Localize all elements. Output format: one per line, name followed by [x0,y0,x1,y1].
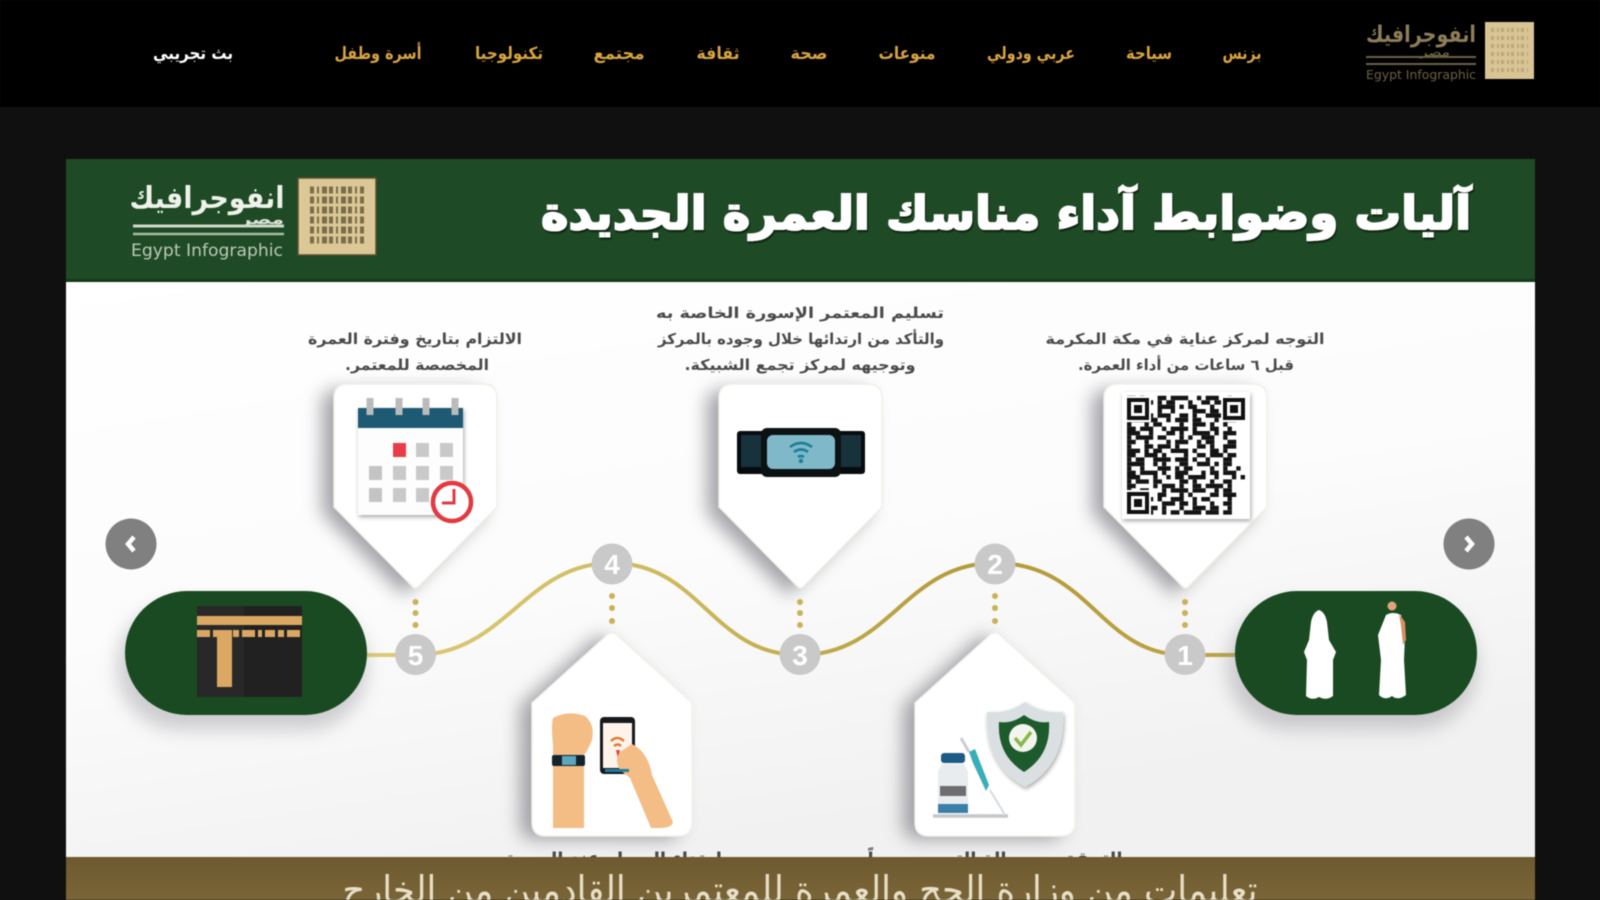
dotted connector: step 3 [797,599,803,628]
step 2 text clipped by band: التحقق من حالة التحصين معاً [867,847,1122,867]
dotted connector: step 4 [609,593,615,624]
dotted connector: step 1 [1182,599,1188,628]
step node 5 [395,634,436,675]
step 1 text: التوجه لمركز عناية في مكة المكرمة [1046,330,1324,348]
icon: woman pilgrim [1304,610,1336,699]
step node 4 [592,544,632,584]
icon: smart wristband [737,428,865,477]
step 1 text [1046,330,1324,374]
dotted connector: step 5 [412,599,418,628]
nav: business: بزنس [1222,44,1262,64]
nav: society: مجتمع [594,44,644,64]
panel: green title banner [66,159,1535,282]
step 5 text: الالتزام بتاريخ وفترة العمرة [308,330,522,348]
nav: tourism: سياحة [1126,44,1172,64]
step 5 text: المخصصة للمعتمر. [345,356,489,374]
nav: health: صحة [790,44,828,64]
dotted connector: step 2 [992,593,998,624]
panel: white infographic body [66,282,1535,860]
nav: arab and international: عربي ودولي [987,44,1075,64]
step node 5: 5 [408,640,423,671]
nav: test broadcast: بث تجريبي [153,44,233,64]
arrow: carousel previous [106,518,156,570]
step node 2 [974,544,1016,584]
card: step 2 vaccination [903,633,1075,839]
banner logo [130,178,376,261]
icon: clock [433,483,471,521]
step node 1: 1 [1177,640,1193,671]
banner logo: انفوجرافيك [130,181,284,216]
card: step 5 calendar [322,384,497,594]
banner logo: مصر [239,212,284,228]
icon: QR code [1122,392,1250,519]
step node 2: 2 [987,549,1003,580]
step node 3: 3 [792,640,808,671]
icon: Kaaba [197,606,302,697]
icon: hand scanning wristband with phone [552,713,673,828]
icon: shield and vaccine [933,702,1063,816]
top navigation bar [0,0,1600,107]
arrow: carousel next [1444,518,1494,570]
step 1 text: قبل ٦ ساعات من أداء العمرة. [1078,355,1294,374]
step 3 text: تسليم المعتمر الإسورة الخاصة به [656,304,944,322]
icon: calendar [358,398,471,521]
icon: man pilgrim [1378,602,1406,698]
nav: miscellaneous: منوعات [878,44,936,64]
title: آليات وضوابط آداء مناسك العمرة الجديدة [541,185,1472,240]
step 4 text clipped by band: ارتداء السوار عند العمرة [506,849,722,867]
site logo [1366,22,1534,82]
step 5 text [308,330,522,374]
step 3 text: والتأكد من ارتدائها خلال وجوده بالمركز [657,329,944,348]
nav: culture: ثقافة [696,44,740,64]
card: step 3 wristband [707,384,882,594]
card: step 4 phone and wristband [520,633,692,839]
nav: family and child: أسرة وطفل [334,42,422,64]
wavy gold timeline [367,563,1235,655]
step node 4: 4 [604,549,620,580]
card: step 1 QR code [1092,384,1267,594]
left pill: Kaaba [117,591,367,730]
site logo: انفوجرافيك [1366,22,1476,48]
site logo: Egypt Infographic [1366,68,1476,82]
nav: technology: تكنولوجيا [475,44,543,64]
right pill: pilgrims [1227,591,1477,730]
step node 1 [1164,634,1206,675]
bottom brown ticker band [66,857,1535,900]
step node 3 [780,634,820,675]
step 3 text [656,304,944,374]
site logo: مصر [1419,46,1450,59]
step 3 text: وتوجيهه لمركز تجمع الشبيكة. [684,356,916,374]
banner logo: Egypt Infographic [131,241,283,261]
